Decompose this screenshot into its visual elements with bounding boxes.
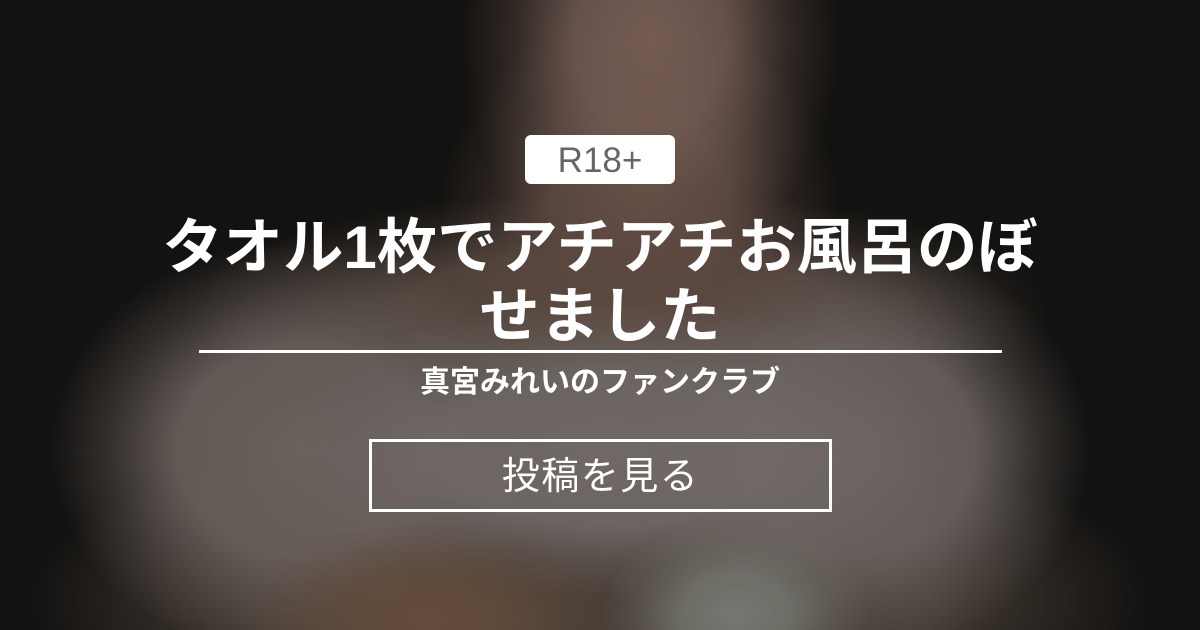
view posts button: [369, 439, 832, 512]
R18 badge: [525, 135, 675, 184]
view posts button: 投稿を見る: [502, 456, 699, 498]
fan club name: 真宮みれいのファンクラブ: [420, 366, 780, 399]
divider line: [199, 350, 1002, 353]
title: せました: [479, 282, 721, 350]
R18 badge: R18+: [558, 141, 642, 180]
title: [162, 213, 1038, 350]
title: タオル1枚でアチアチお風呂のぼ: [162, 213, 1038, 281]
